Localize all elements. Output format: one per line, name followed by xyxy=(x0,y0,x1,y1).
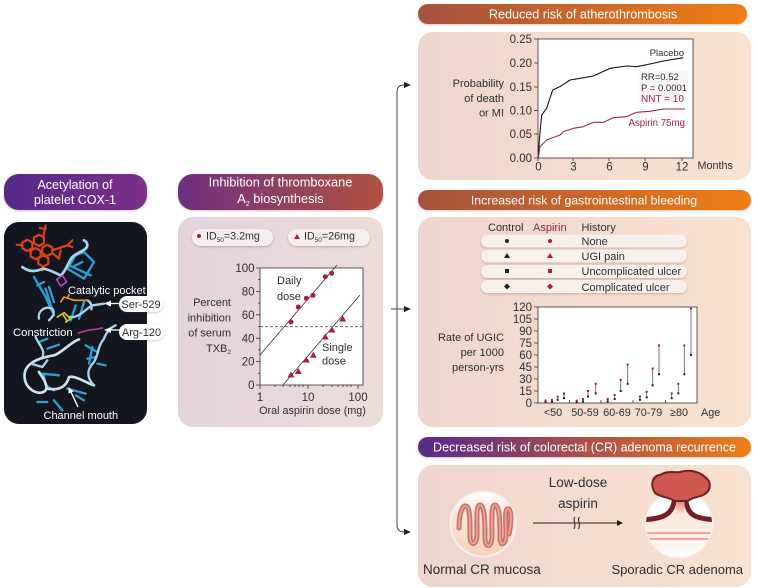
text: Catalytic pocket: Catalytic pocket xyxy=(68,285,146,297)
chart: probability of death or MI: 0.20 xyxy=(510,58,532,70)
chart: probability of death or MI xyxy=(510,34,734,174)
callout: Arg-120: Arg-120 xyxy=(122,327,161,339)
text: y-axis label: Percent xyxy=(193,297,231,309)
chart: rate of UGIC by age: 105 xyxy=(513,314,532,326)
chart: dose response: 1 xyxy=(257,392,263,404)
chart: dose response: 10 xyxy=(302,392,314,404)
heading: Inhibition of thromboxane A2 biosynthesis: 2 xyxy=(246,201,250,208)
heading: Acetylation of platelet COX-1: platelet COX-1 xyxy=(34,193,116,207)
chart: probability of death or MI: Aspirin 75mg xyxy=(628,118,685,129)
chart: rate of UGIC by age: 120 xyxy=(513,302,532,314)
text: Normal CR mucosa: Normal CR mucosa xyxy=(423,562,541,577)
text: y-axis label: of death xyxy=(464,93,504,105)
table: history legend: Aspirin xyxy=(533,222,567,234)
text: y-axis label: or MI xyxy=(479,108,504,120)
chart: probability of death or MI: 0.00 xyxy=(510,153,532,165)
text: y-axis label: 2 xyxy=(227,349,231,356)
chart: rate of UGIC by age: 60 xyxy=(519,350,532,362)
legend: single dose ID50: ID xyxy=(304,230,315,242)
table: history legend: History xyxy=(582,222,616,234)
chart: dose response: Single xyxy=(322,342,353,354)
chart: probability of death or MI: 3 xyxy=(570,162,577,174)
chart: rate of UGIC by age: ≥80 xyxy=(670,407,688,419)
chart: rate of UGIC by age: 50-59 xyxy=(571,407,599,419)
heading: Increased risk of gastrointestinal bleeding xyxy=(418,190,751,210)
callout: Ser-529: Ser-529 xyxy=(121,299,161,311)
chart: probability of death or MI: Months xyxy=(698,160,734,172)
heading: Acetylation of platelet COX-1: Acetylation of xyxy=(37,178,113,192)
panel: gastrointestinal bleeding xyxy=(418,217,751,427)
chart: rate of UGIC by age: 60-69 xyxy=(603,407,631,419)
chart: rate of UGIC by age: 90 xyxy=(519,326,532,338)
icon: upper protein ribbon xyxy=(22,240,104,322)
icon: lower protein ribbon xyxy=(25,325,116,410)
legend: single dose ID50: =26mg xyxy=(322,230,355,242)
heading: Decreased risk of colorectal adenoma recurrence xyxy=(418,437,751,457)
chart: dose response xyxy=(235,263,368,417)
heading: Reduced risk of atherothrombosis xyxy=(418,4,747,24)
panel: colorectal adenoma xyxy=(418,465,751,587)
heading: Inhibition of thromboxane A2 biosynthesis: Inhibition of thromboxane xyxy=(209,174,352,190)
callout: Arg-120 xyxy=(104,324,164,340)
table: history legend: Uncomplicated ulcer xyxy=(582,266,681,278)
chart: probability of death or MI: 12 xyxy=(676,162,688,174)
chart: rate of UGIC by age: 0 xyxy=(526,398,532,410)
arrow: channel mouth pointer xyxy=(68,387,78,407)
heading: Inhibition of thromboxane A2 biosynthesis: A xyxy=(237,191,246,206)
text: Constriction: Constriction xyxy=(13,327,73,339)
chart: probability of death or MI: P = 0.0001 xyxy=(641,83,687,94)
chart: probability of death or MI: 0.25 xyxy=(510,34,532,46)
table: history legend xyxy=(481,222,687,294)
chart: dose response: 60 xyxy=(242,310,254,322)
chart: dose response: Daily xyxy=(277,275,302,287)
chart: dose response: dose xyxy=(277,291,301,303)
chart: rate of UGIC by age xyxy=(513,302,720,419)
legend: daily dose ID50 xyxy=(192,229,273,246)
chart: rate of UGIC by age: 15 xyxy=(519,386,532,398)
legend: daily dose ID50: 50 xyxy=(217,237,224,244)
heading: Inhibition of thromboxane A2 biosynthesis: biosynthesis xyxy=(250,191,324,206)
chart: rate of UGIC by age: Age xyxy=(701,407,720,419)
chart: probability of death or MI: 0.15 xyxy=(510,82,532,94)
chart: probability of death or MI: NNT = 10 xyxy=(641,94,684,105)
arrow: connectors to the three outcomes xyxy=(391,82,411,535)
chart: probability of death or MI: 0.10 xyxy=(510,106,532,118)
text: y-axis label: per 1000 xyxy=(461,347,504,359)
chart: rate of UGIC by age: 70-79 xyxy=(635,407,662,419)
heading: Decreased risk of colorectal adenoma recurrence: Decreased risk of colorectal (CR) adenoma recurrence xyxy=(433,440,736,454)
chart: probability of death or MI: RR=0.52 xyxy=(641,72,679,83)
chart: rate of UGIC by age: 45 xyxy=(519,362,532,374)
text: y-axis label: TXB xyxy=(206,343,227,355)
legend: daily dose ID50: =3.2mg xyxy=(224,230,260,242)
table: history legend: Control xyxy=(488,222,523,234)
heading: Inhibition of thromboxane A2 biosynthesis xyxy=(178,174,383,210)
panel: atherothrombosis chart xyxy=(418,32,751,180)
chart: probability of death or MI: 0 xyxy=(535,162,542,174)
text: Channel mouth: Channel mouth xyxy=(44,410,118,422)
legend: single dose ID50: 50 xyxy=(315,237,322,244)
chart: probability of death or MI: 6 xyxy=(606,162,613,174)
chart: rate of UGIC by age: 30 xyxy=(519,374,532,386)
chart: probability of death or MI: 9 xyxy=(642,162,649,174)
text: Sporadic CR adenoma: Sporadic CR adenoma xyxy=(612,562,744,577)
text: Low-dose aspirin: aspirin xyxy=(558,496,598,511)
text: y-axis label: Rate of UGIC xyxy=(438,332,504,344)
text: y-axis label: of serum xyxy=(188,328,231,340)
panel: thromboxane inhibition chart xyxy=(178,217,383,427)
chart: dose response: dose xyxy=(322,356,346,368)
heading: Reduced risk of atherothrombosis: Reduced risk of atherothrombosis xyxy=(489,8,677,22)
text: y-axis label: Probability xyxy=(453,78,504,90)
heading: Acetylation of platelet COX-1 xyxy=(4,174,147,210)
chart: dose response: 80 xyxy=(242,286,254,298)
icon: heme molecule xyxy=(17,225,72,270)
icon: sporadic adenoma xyxy=(644,470,714,558)
chart: dose response: 100 xyxy=(348,392,368,404)
chart: rate of UGIC by age: <50 xyxy=(544,407,562,419)
table: history legend: None xyxy=(582,236,608,248)
icon: normal mucosa xyxy=(450,492,516,556)
text: Low-dose aspirin: Low-dose xyxy=(549,475,607,490)
legend: daily dose ID50: ID xyxy=(206,230,217,242)
arrow: progression xyxy=(533,517,623,529)
white box behind statistics xyxy=(638,70,688,103)
chart: probability of death or MI: Placebo xyxy=(650,48,684,59)
chart: dose response: 20 xyxy=(242,356,254,368)
heading: Increased risk of gastrointestinal bleeding: Increased risk of gastrointestinal bleeding xyxy=(471,194,697,208)
legend: single dose ID50 xyxy=(288,229,370,246)
callout: Ser-529 xyxy=(104,296,163,312)
table: history legend: Complicated ulcer xyxy=(582,282,670,294)
chart: dose response: Oral aspirin dose (mg) xyxy=(259,405,366,417)
chart: probability of death or MI: 0.05 xyxy=(510,129,532,141)
chart: dose response: 100 xyxy=(235,263,254,275)
chart: dose response: 40 xyxy=(242,334,254,346)
table: history legend: UGI pain xyxy=(582,251,625,263)
text: y-axis label: person-yrs xyxy=(452,362,504,374)
panel: COX-1 protein structure xyxy=(4,222,164,424)
chart: rate of UGIC by age: 75 xyxy=(519,338,532,350)
chart: dose response: 0 xyxy=(248,380,254,392)
text: y-axis label: inhibition xyxy=(188,312,231,324)
